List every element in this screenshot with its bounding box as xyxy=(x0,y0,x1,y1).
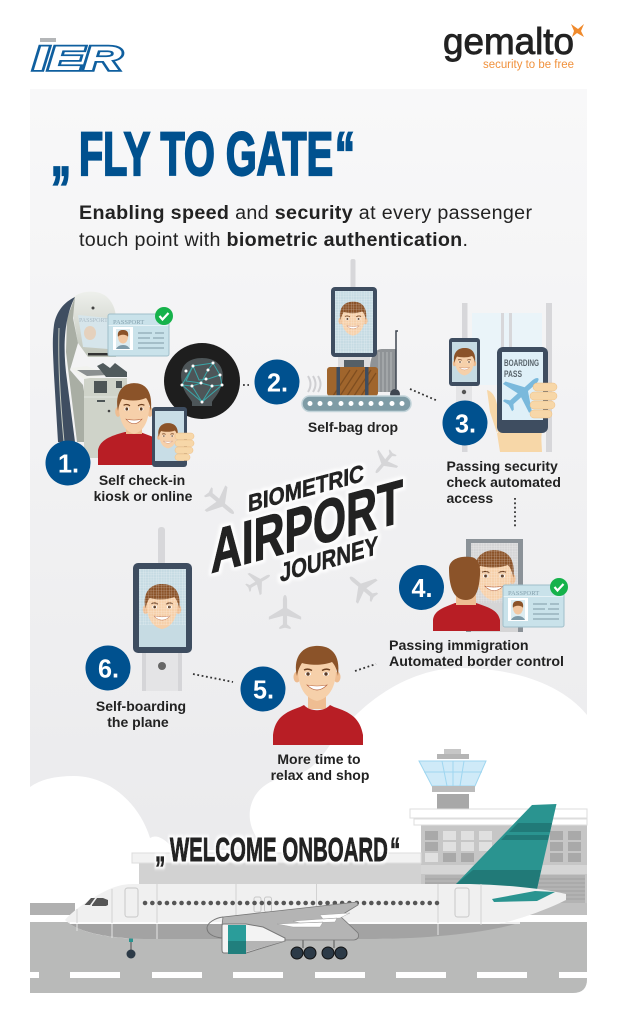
step 5 label: relax and shop xyxy=(271,767,369,783)
engine xyxy=(222,924,285,954)
step 6 badge xyxy=(86,646,130,690)
subtitle xyxy=(79,202,532,251)
fuselage xyxy=(65,884,566,939)
check mark xyxy=(155,307,173,325)
step 3 label: Passing security xyxy=(446,458,558,474)
step 3 label: check automated xyxy=(446,474,561,490)
step 6 label: the plane xyxy=(107,714,169,730)
logo: gemalto: security to be free xyxy=(483,59,574,71)
dotted connectors xyxy=(193,385,515,682)
central heading: biometric airport journey: JOURNEY xyxy=(280,530,378,588)
welcome heading: WELCOME ONBOARD xyxy=(170,831,388,868)
cockpit windows xyxy=(84,898,108,906)
step 5 badge xyxy=(240,666,286,712)
kiosk xyxy=(53,292,127,458)
central heading: biometric airport journey: BIOMETRIC xyxy=(248,460,364,518)
wing xyxy=(207,902,358,940)
nose gear xyxy=(126,938,136,958)
passport xyxy=(108,314,169,356)
step 3 illustration: security gate and boarding pass: BOARDING xyxy=(504,358,539,368)
step 4 label: Automated border control xyxy=(389,654,564,670)
step 3 label xyxy=(446,458,561,506)
title: “ xyxy=(335,119,355,188)
step 6 label xyxy=(96,698,186,730)
doors xyxy=(125,888,469,917)
kiosk: PASSPORT xyxy=(79,318,108,324)
subtitle: touch point with biometric authentication. xyxy=(79,229,468,251)
step 3 label: access xyxy=(446,490,493,506)
cabin windows xyxy=(145,901,437,905)
step 4 label xyxy=(389,638,564,670)
step 5 person xyxy=(273,646,363,745)
step 2 badge: 2. xyxy=(267,368,288,398)
step 4 badge: 4. xyxy=(412,573,432,603)
step 3 illustration: security gate and boarding pass: PASS xyxy=(504,369,522,379)
panel lines xyxy=(77,884,481,925)
step 1 label xyxy=(94,472,193,504)
step 1 badge xyxy=(46,440,90,486)
step 2 label: Self-bag drop xyxy=(308,419,398,435)
person with phone xyxy=(98,383,194,467)
central heading: biometric airport journey xyxy=(211,460,403,588)
step 1 label: kiosk or online xyxy=(94,488,193,504)
welcome heading: „ xyxy=(155,831,165,868)
step 3 illustration: security gate and boarding pass xyxy=(449,303,557,452)
main gear xyxy=(291,938,347,959)
logo: IER: IER xyxy=(33,40,123,78)
stabilizer xyxy=(492,891,555,902)
step 4 label: Passing immigration xyxy=(389,638,529,654)
central heading: biometric airport journey: AIRPORT xyxy=(211,468,403,587)
background panel xyxy=(30,89,587,993)
step 4 badge xyxy=(399,565,444,610)
step 3 badge: 3. xyxy=(455,408,476,438)
airplane xyxy=(65,804,566,959)
step 4 illustration: border control xyxy=(433,539,568,632)
welcome heading: “ xyxy=(390,831,400,868)
belly xyxy=(70,924,515,939)
step 1 illustration: kiosk, passport, selfie xyxy=(53,292,240,467)
low terminal xyxy=(132,853,421,888)
step 6 illustration: boarding gate xyxy=(133,527,192,691)
step 2 illustration: bag drop xyxy=(302,259,411,412)
step 6 label: Self-boarding xyxy=(96,698,186,714)
step 6 badge: 6. xyxy=(98,654,119,684)
clouds xyxy=(30,668,587,922)
terminal building xyxy=(410,809,587,903)
step 5 label: More time to xyxy=(277,751,361,767)
tail fin xyxy=(455,804,556,889)
step 5 badge: 5. xyxy=(253,674,274,704)
title: FLY TO GATE xyxy=(79,119,333,188)
logo: IER xyxy=(33,38,123,78)
subtitle: Enabling speed and security at every passenger xyxy=(79,202,532,224)
small planes xyxy=(197,444,403,629)
runway xyxy=(30,903,587,993)
step 5 label xyxy=(271,751,369,783)
step 1 badge: 1. xyxy=(58,448,79,478)
step 3 badge xyxy=(442,400,488,446)
title: „ xyxy=(51,119,71,188)
step 2 badge xyxy=(254,360,300,404)
step 1 label: Self check-in xyxy=(99,472,185,488)
logo: gemalto: gemalto xyxy=(443,21,574,62)
biometric face scan xyxy=(164,343,240,419)
control tower xyxy=(419,749,486,809)
